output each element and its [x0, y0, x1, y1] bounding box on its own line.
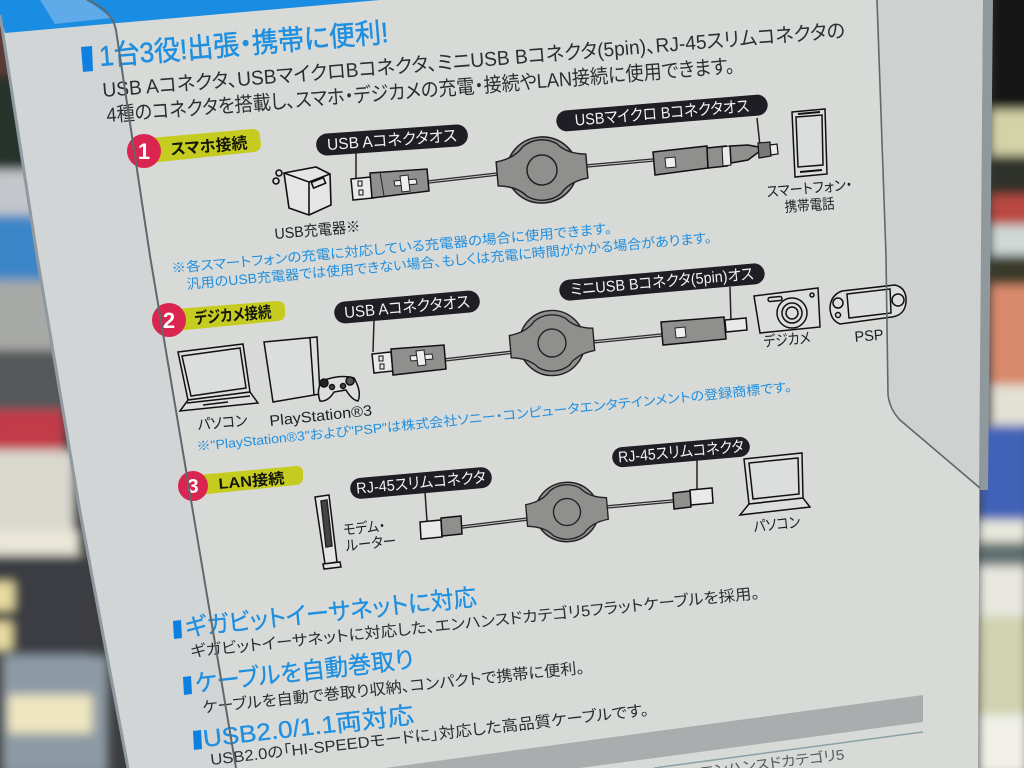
note: trademarks: ※"PlayStation®3"および"PSP"は株式会社ソニー・コンピュータエンタテインメントの登録商標です。 — [196, 379, 792, 454]
gray stripe — [385, 695, 923, 768]
icon: USB charger — [273, 167, 331, 215]
step 1 badge: スマホ接続: 1 — [138, 139, 150, 164]
label: モデム・ルーター: モデム・ — [343, 517, 386, 539]
clear plastic blister left zone — [0, 0, 236, 768]
label: パソコン right: パソコン — [752, 514, 801, 536]
cable diagram 3 — [420, 460, 713, 545]
intro text: USB Aコネクタ、USBマイクロBコネクタ、ミニUSB Bコネクタ(5pin)、RJ-45スリムコネクタの — [102, 19, 846, 102]
label: モデム・ルーター: ルーター — [344, 533, 397, 555]
icon: digital camera — [754, 288, 820, 333]
note: charger: 汎用のUSB充電器では使用できない場合、もしくは充電に時間がかかる場合があります。 — [186, 229, 712, 292]
tag: RJ-45 right: RJ-45スリムコネクタ — [617, 438, 745, 466]
blister glare on blue band — [40, 0, 112, 24]
package edge strip right — [979, 0, 993, 490]
step 3 badge: LAN接続: LAN接続 — [218, 469, 285, 493]
label: PlayStation 3: PlayStation®3 — [269, 402, 373, 430]
feature: auto reel: ケーブルを自動巻取り — [194, 646, 415, 698]
step 2 badge: デジカメ接続: 2 — [163, 308, 175, 333]
tag: USB micro B: USBマイクロ Bコネクタオス — [574, 97, 750, 130]
icon: modem router — [315, 495, 341, 569]
tag: RJ-45 left: RJ-45スリムコネクタ — [355, 468, 487, 498]
icon: laptop right — [740, 453, 810, 515]
icon: smartphone — [792, 109, 827, 177]
package edge strip left — [0, 15, 128, 768]
note: charger: ※各スマートフォンの充電に対応している充電器の場合に使用できます。 — [171, 220, 612, 276]
tag: mini USB B: ミニUSB Bコネクタ(5pin)オス — [570, 265, 754, 299]
feature: gigabit: ギガビットイーサネットに対応 — [184, 584, 478, 642]
tag: USB A row 2: USB Aコネクタオス — [343, 293, 471, 322]
step 2 badge: デジカメ接続: デジカメ接続 — [194, 302, 272, 328]
thin rule at bottom — [654, 732, 923, 768]
intro text: 4種のコネクタを搭載し、スマホ・デジカメの充電・接続やLAN接続に使用できます。 — [106, 55, 735, 127]
step 3 badge: LAN接続 — [178, 466, 303, 501]
cable diagram 2 — [372, 287, 747, 379]
heading: 1台3役: 1台3役!出張・携帯に便利! — [98, 17, 389, 72]
label: モデム・ルーター — [343, 517, 397, 555]
icon: laptop — [178, 344, 258, 411]
label: smartphone — [766, 178, 853, 216]
step 1 badge: スマホ接続 — [127, 129, 261, 168]
feature: USB2.0: USB2.0の「HI-SPEEDモードに」対応した高品質ケーブルです。 — [209, 700, 650, 768]
icon: PSP — [830, 285, 906, 324]
step 3 badge: LAN接続: 3 — [187, 476, 199, 498]
label: smartphone: 携帯電話 — [784, 196, 835, 216]
clear plastic blister right zone — [877, 0, 983, 490]
feature: USB2.0: USB2.0/1.1両対応 — [202, 702, 415, 753]
label: smartphone: スマートフォン・ — [766, 178, 853, 201]
feature: gigabit: ギガビットイーサネットに対応した、エンハンスドカテゴリ5フラットケーブルを採用。 — [189, 583, 760, 661]
label: パソコン: パソコン — [196, 413, 248, 434]
icon: PlayStation 3 console and controller — [264, 337, 359, 402]
tag: USB A: USB Aコネクタオス — [327, 127, 458, 154]
label: デジカメ: デジカメ — [763, 329, 811, 351]
step 1 badge: スマホ接続: スマホ接続 — [170, 134, 248, 159]
label: USB充電器: USB充電器※ — [274, 219, 361, 243]
step 2 badge: デジカメ接続 — [152, 301, 285, 337]
feature: auto reel: ケーブルを自動で巻取り収納、コンパクトで携帯に便利。 — [201, 658, 585, 717]
cable diagram 1 — [351, 118, 778, 207]
label: PSP: PSP — [854, 327, 884, 346]
blue header band — [0, 0, 380, 33]
